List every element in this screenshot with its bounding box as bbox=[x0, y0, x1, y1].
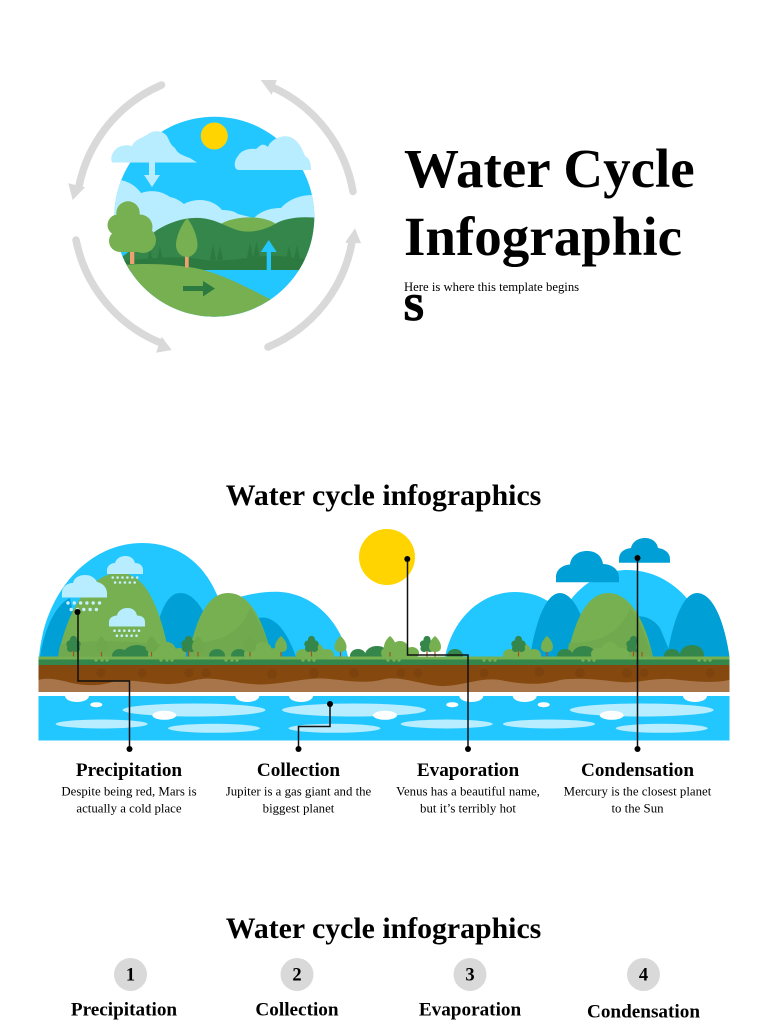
label: collection: Jupiter is a gas giant and the bbox=[226, 784, 372, 798]
sun bbox=[201, 122, 228, 150]
sun bbox=[359, 529, 415, 585]
cloud: right bbox=[235, 136, 311, 170]
ground layers bbox=[38, 656, 730, 692]
panel: landscape illustration bbox=[38, 529, 730, 740]
illustration: water cycle landscape circle bbox=[108, 116, 314, 317]
arrow: runoff right bbox=[183, 281, 215, 296]
background clouds bbox=[110, 180, 320, 250]
heading: section three: Water cycle infographics bbox=[226, 912, 541, 945]
label: condensation bbox=[564, 760, 712, 816]
step 3: 3 bbox=[465, 966, 475, 986]
bushes dark bbox=[112, 645, 704, 665]
step 3: Evaporation bbox=[419, 1000, 521, 1020]
trees bbox=[66, 636, 648, 658]
arrow: evaporation up bbox=[261, 240, 277, 270]
title: Water Cycle bbox=[404, 138, 695, 199]
step 2: Collection bbox=[255, 1000, 339, 1020]
far hill bbox=[222, 217, 276, 232]
connector: evaporation bbox=[404, 556, 471, 752]
dark green hills bbox=[122, 217, 314, 270]
label: precipitation: Precipitation bbox=[76, 760, 182, 781]
step 2 bbox=[255, 958, 339, 1020]
label: condensation: to the Sun bbox=[611, 802, 664, 816]
cloud: left with rain arrow bbox=[111, 131, 197, 187]
heading: section two: Water cycle infographics bbox=[226, 479, 541, 512]
step 4: 4 bbox=[639, 966, 648, 986]
clouds and rain bbox=[62, 556, 145, 637]
label: condensation: Condensation bbox=[581, 760, 694, 781]
title: Infographic bbox=[404, 206, 682, 267]
connector: collection bbox=[296, 701, 333, 752]
step 4 bbox=[587, 958, 700, 1022]
label: precipitation bbox=[61, 760, 197, 816]
step 1 bbox=[71, 958, 177, 1020]
step 1: Precipitation bbox=[71, 1000, 177, 1020]
right mountains bbox=[445, 570, 730, 657]
step 2: 2 bbox=[292, 966, 302, 986]
silhouette pines bbox=[148, 242, 300, 260]
label: collection: Collection bbox=[257, 760, 340, 781]
label: evaporation: Evaporation bbox=[417, 760, 519, 781]
label: collection: biggest planet bbox=[263, 802, 335, 816]
label: evaporation: Venus has a beautiful name, bbox=[396, 784, 540, 798]
stray letter S: S bbox=[404, 288, 424, 329]
left mountains bbox=[39, 543, 348, 657]
connector: precipitation bbox=[74, 609, 132, 752]
tree: slim bbox=[176, 218, 198, 268]
step 3 bbox=[419, 958, 521, 1020]
title bbox=[404, 138, 695, 267]
lake bbox=[200, 270, 299, 317]
icon: cycle arrows ring bbox=[68, 80, 361, 353]
label: evaporation: but it’s terribly hot bbox=[420, 802, 516, 816]
label: condensation: Mercury is the closest planet bbox=[564, 784, 712, 798]
label: precipitation: actually a cold place bbox=[76, 802, 182, 816]
step 4: Condensation bbox=[587, 1002, 700, 1022]
connector: condensation bbox=[634, 555, 640, 752]
step 1: 1 bbox=[126, 966, 135, 986]
bushes light bbox=[148, 641, 629, 661]
label: precipitation: Despite being red, Mars is bbox=[61, 784, 197, 798]
condensation clouds bbox=[556, 538, 670, 582]
foreground hill bbox=[126, 264, 271, 317]
subtitle: Here is where this template begins bbox=[404, 280, 579, 294]
water bbox=[38, 696, 730, 740]
tree: large bbox=[108, 201, 156, 264]
label: collection bbox=[226, 760, 372, 816]
label: evaporation bbox=[396, 760, 540, 816]
